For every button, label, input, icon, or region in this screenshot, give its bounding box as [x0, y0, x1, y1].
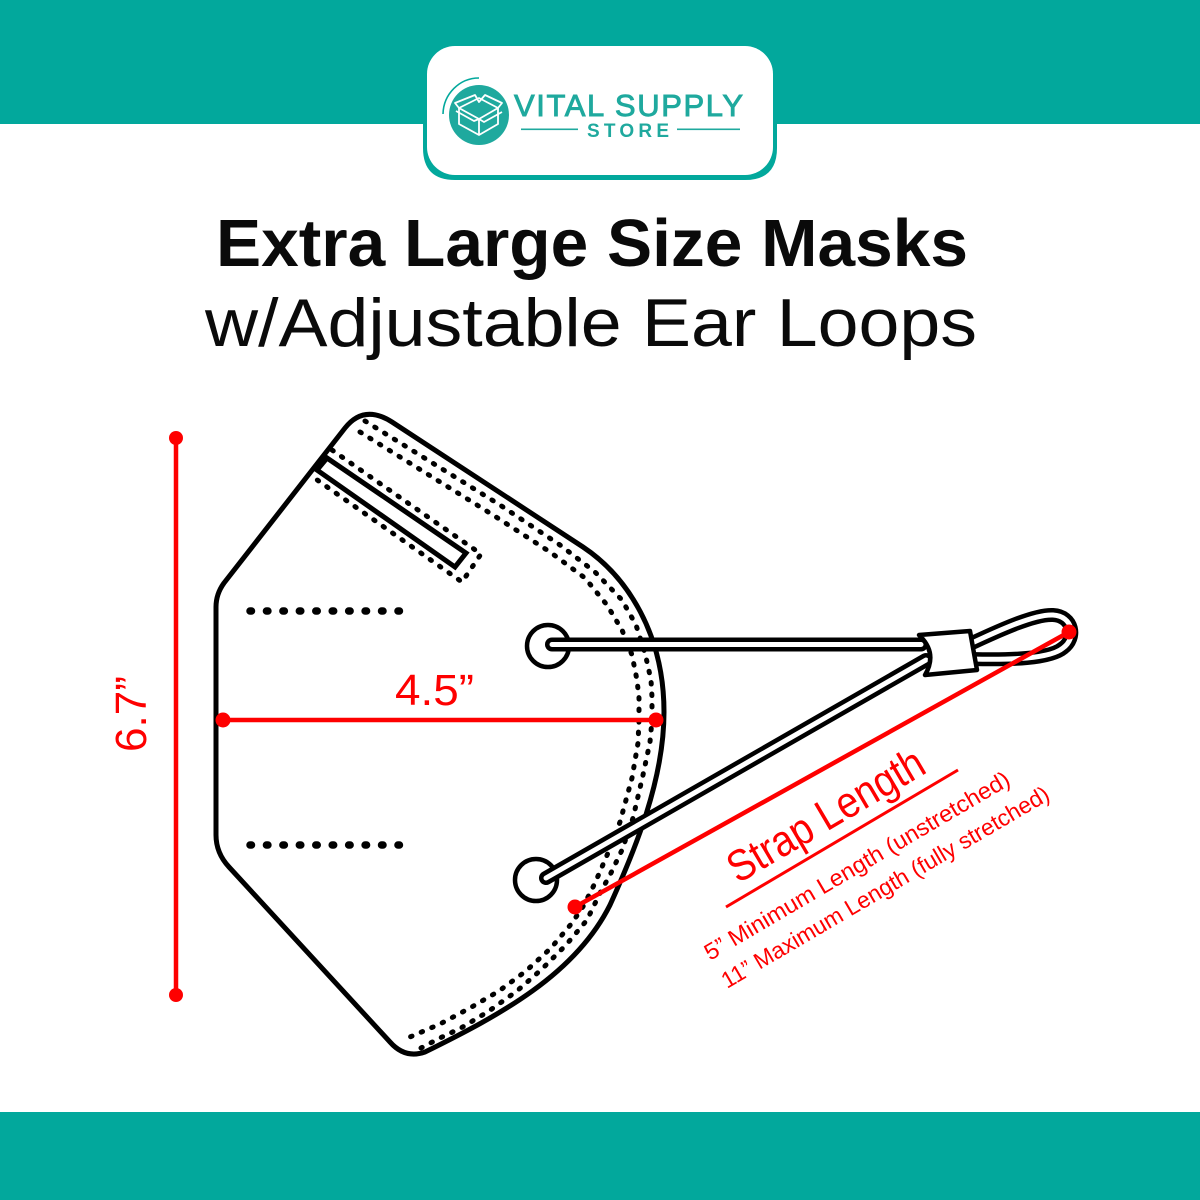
icon: box in circle: [443, 78, 509, 145]
upper ear anchor: [527, 625, 569, 667]
strap label underline: [726, 770, 958, 907]
nose strip: [317, 458, 466, 567]
logo badge: [423, 46, 777, 180]
lower ear anchor: [515, 859, 557, 901]
top teal band: [0, 0, 1200, 124]
outer stitching: [365, 421, 652, 1048]
fold stitching lower: [250, 841, 400, 849]
minimum length note: 5” Minimum Length (unstretched): [699, 766, 1014, 965]
maximum length note: 11” Maximum Length (fully stretched): [716, 781, 1054, 993]
mask outline: [216, 414, 664, 1054]
strap label: Strap Length: [718, 738, 933, 893]
width label: 4.5”: [395, 666, 474, 715]
logo wordmark: VITAL SUPPLY: [514, 88, 743, 123]
fold stitching upper: [250, 607, 400, 615]
height label: 6.7”: [107, 676, 156, 752]
title: Extra Large Size Masks: [216, 206, 968, 281]
lower strap: [546, 660, 926, 878]
logo subline: STORE: [587, 121, 669, 142]
bottom teal band: [0, 1112, 1200, 1200]
nose strip stitching: [313, 450, 481, 582]
width measure: [216, 712, 664, 728]
inner stitching: [360, 432, 639, 1037]
height measure: [169, 431, 183, 1002]
subtitle: w/Adjustable Ear Loops: [204, 285, 977, 361]
strap adjuster: [919, 631, 977, 675]
mask diagram: [216, 414, 1071, 1054]
strap measure: [568, 624, 1076, 914]
strap loop: [972, 615, 1071, 659]
upper strap: [552, 638, 921, 652]
